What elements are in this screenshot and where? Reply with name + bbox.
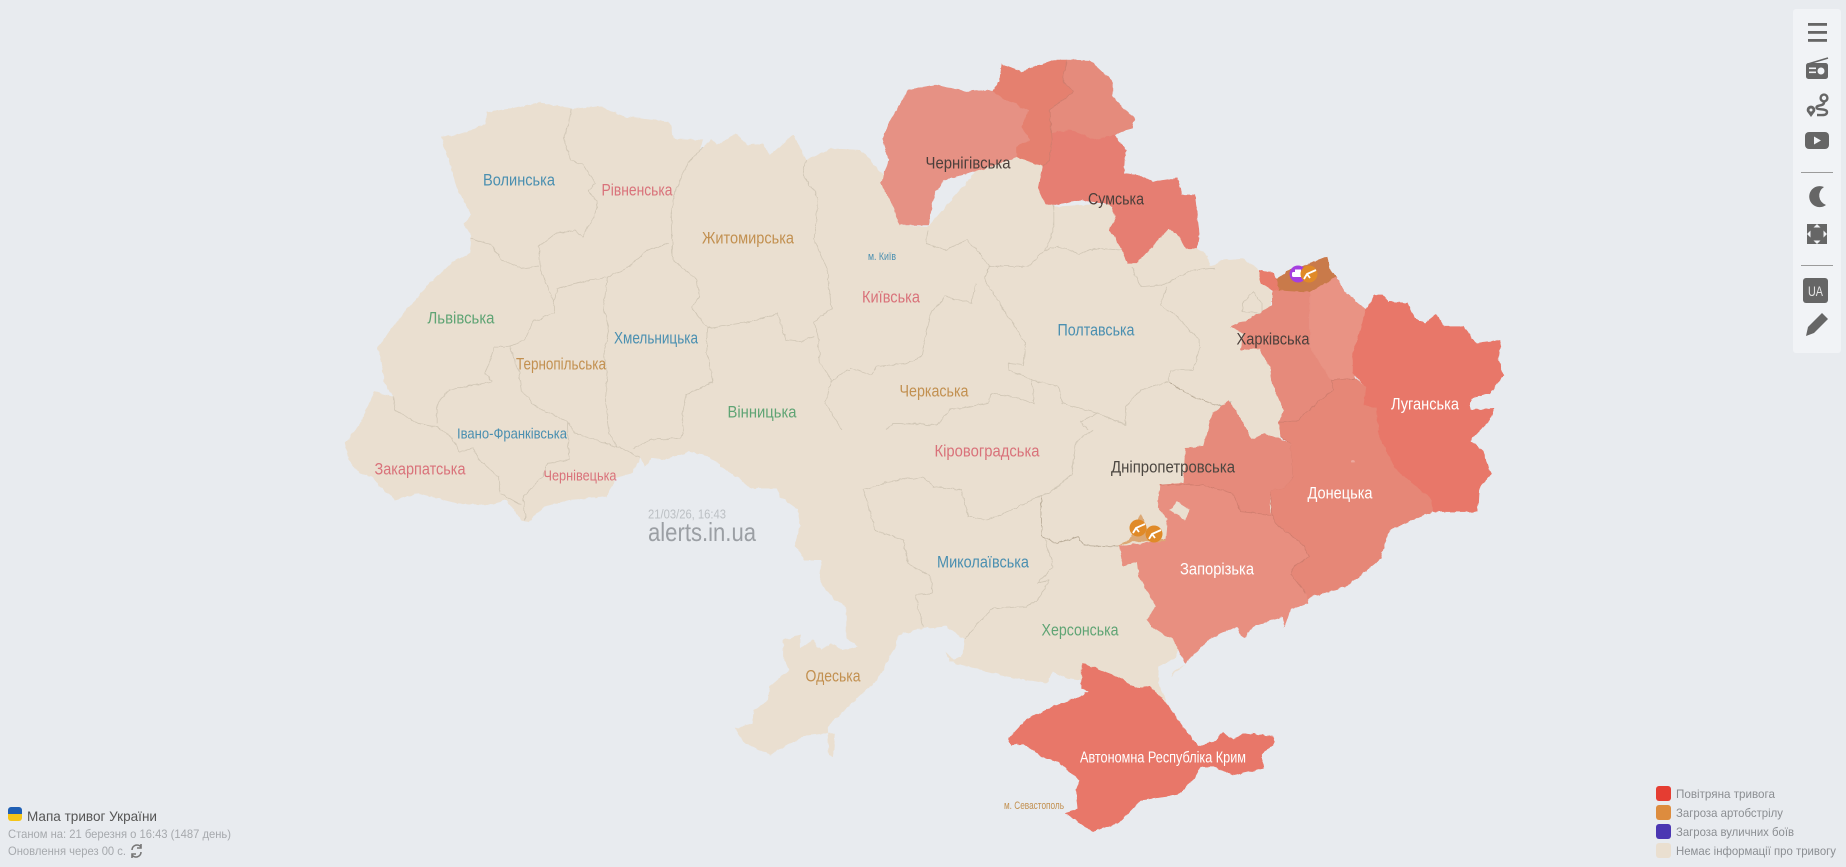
icon: dark mode moon bbox=[1809, 186, 1826, 207]
oblast: Сумська, southern part bbox=[1039, 130, 1199, 263]
divider lines bbox=[1801, 172, 1833, 266]
label: Дніпропетровська: Дніпропетровська bbox=[1111, 458, 1235, 476]
alert region: Чернігівська, Сумська, Харківська, Луганська, Донецька bbox=[881, 60, 1504, 610]
artillery threat zone: Нікопольський район bbox=[1118, 513, 1166, 547]
marker: artillery threat, Нікополь west bbox=[1130, 520, 1146, 536]
Запорізька: reservoir zone bbox=[1170, 502, 1191, 520]
legend item: street fighting threat: Загроза вуличних боїв bbox=[1676, 825, 1794, 839]
oblast: Автономна Республіка Крим bbox=[1009, 663, 1275, 832]
watermark timestamp: 21/03/26, 16:43 bbox=[648, 506, 726, 522]
label: Закарпатська: Закарпатська bbox=[374, 460, 466, 478]
alert region: Дніпропетровська east, Запорізька, Крим bbox=[1009, 402, 1309, 832]
language button: UA bbox=[1808, 283, 1824, 299]
oblast: Донецька bbox=[1271, 378, 1433, 610]
icon: menu bbox=[1808, 23, 1827, 42]
label: Сумська: Сумська bbox=[1088, 190, 1144, 208]
marker: street fighting threat, Харківська bbox=[1290, 266, 1306, 282]
legend item: no information: Немає інформації про тривогу bbox=[1676, 844, 1836, 858]
oblast: Запорізька bbox=[1120, 485, 1309, 663]
label: Івано-Франківська: Івано-Франківська bbox=[457, 426, 568, 442]
label: Волинська: Волинська bbox=[483, 170, 555, 190]
label: Київська: Київська bbox=[862, 288, 920, 306]
label: Одеська: Одеська bbox=[806, 666, 861, 686]
label: м. Севастополь: м. Севастополь bbox=[1004, 800, 1064, 812]
label: Луганська: Луганська bbox=[1391, 394, 1459, 414]
oblast name labels bbox=[374, 154, 1459, 812]
label: м. Київ: м. Київ bbox=[868, 251, 896, 263]
watermark site name: alerts.in.ua bbox=[648, 517, 756, 547]
label: Харківська: Харківська bbox=[1236, 330, 1310, 348]
label: Кіровоградська: Кіровоградська bbox=[934, 442, 1040, 460]
icon: Ukrainian flag bbox=[8, 807, 22, 821]
neutral oblasts: western landmass bbox=[345, 103, 930, 560]
label: Тернопільська: Тернопільська bbox=[516, 354, 606, 374]
oblast: Сумська, northern part bbox=[1050, 60, 1134, 140]
oblast shapes bbox=[345, 60, 1504, 832]
label: Хмельницька: Хмельницька bbox=[614, 328, 698, 348]
oblast: Дніпропетровська, eastern districts bbox=[1160, 402, 1292, 515]
threat markers bbox=[1130, 266, 1318, 542]
icon: fullscreen bbox=[1807, 224, 1827, 244]
language button bbox=[1803, 278, 1828, 303]
label: Чернігівська: Чернігівська bbox=[926, 154, 1011, 172]
label: Вінницька: Вінницька bbox=[728, 402, 797, 422]
legend bbox=[1656, 786, 1836, 858]
label: Донецька: Донецька bbox=[1308, 484, 1373, 502]
status date: Станом на: 21 березня о 16:43 (1487 день) bbox=[8, 827, 231, 841]
label: Херсонська: Херсонська bbox=[1042, 620, 1119, 640]
label: Житомирська: Житомирська bbox=[702, 228, 794, 248]
label: Автономна Республіка Крим: Автономна Республіка Крим bbox=[1080, 750, 1246, 766]
icon: radio bbox=[1806, 58, 1828, 79]
icon: pencil bbox=[1806, 313, 1828, 336]
marker: artillery threat, Нікополь east bbox=[1146, 526, 1162, 542]
map of Ukraine bbox=[345, 60, 1504, 832]
oblast: Чернігівська bbox=[881, 85, 1030, 225]
neutral oblasts: southern landmass bbox=[720, 430, 1218, 757]
toolbar panel bbox=[1793, 9, 1841, 353]
title: Мапа тривог України bbox=[27, 808, 157, 824]
label: Полтавська: Полтавська bbox=[1058, 320, 1135, 340]
legend item: air alert: Повітряна тривога bbox=[1676, 787, 1775, 801]
neutral oblasts: central landmass bbox=[850, 150, 1297, 520]
Харківська: eastern lighter district bbox=[1310, 277, 1366, 380]
update countdown: Оновлення через 00 с. bbox=[8, 844, 126, 858]
label: Запорізька: Запорізька bbox=[1180, 560, 1254, 578]
label: Львівська: Львівська bbox=[428, 308, 495, 328]
icon: route bbox=[1807, 95, 1827, 117]
icon: refresh bbox=[132, 844, 141, 858]
icon: video player bbox=[1805, 132, 1829, 149]
oblast: Луганська bbox=[1353, 295, 1504, 512]
Харківська: artillery threat zone bbox=[1277, 257, 1336, 292]
label: Миколаївська: Миколаївська bbox=[937, 552, 1029, 572]
marker: artillery threat, Харківська bbox=[1300, 266, 1318, 282]
oblast: Харківська bbox=[1232, 257, 1366, 422]
label: Чернівецька: Чернівецька bbox=[544, 468, 617, 484]
Харківська: northwestern red district bbox=[1260, 270, 1279, 290]
legend item: artillery threat: Загроза артобстрілу bbox=[1676, 806, 1783, 820]
oblast: Чернігівська, eastern districts bbox=[993, 60, 1073, 167]
label: Черкаська: Черкаська bbox=[900, 382, 969, 400]
label: Рівненська: Рівненська bbox=[602, 180, 673, 200]
map title block bbox=[8, 807, 231, 858]
